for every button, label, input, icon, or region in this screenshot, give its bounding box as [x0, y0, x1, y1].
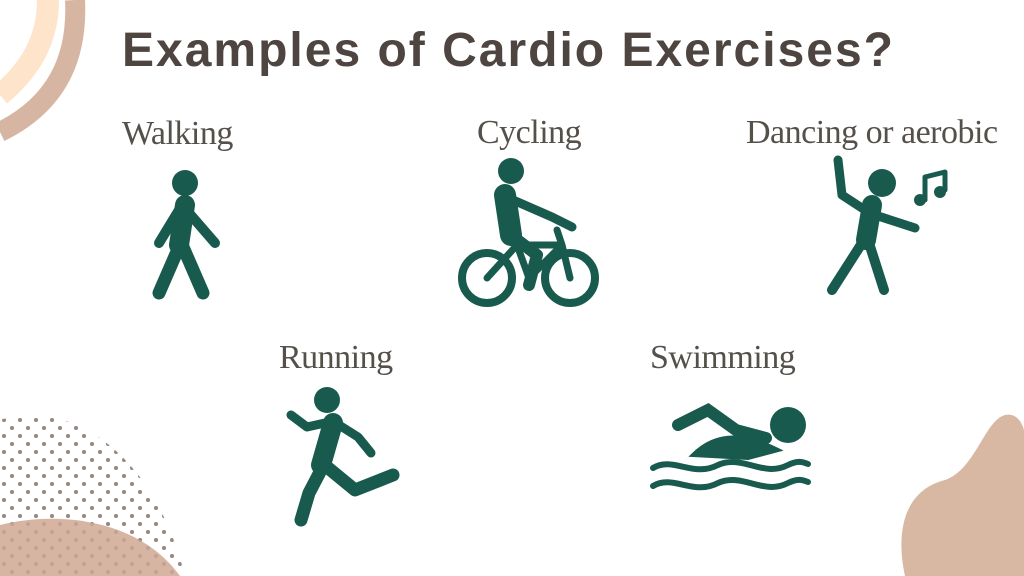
label: running: Running	[279, 339, 393, 376]
label: dancing: Dancing or aerobic	[746, 114, 998, 151]
title: Examples of Cardio Exercises?	[122, 24, 895, 77]
decoration: bottom-left dots and blob	[0, 418, 182, 576]
icon: walking	[152, 170, 220, 300]
icon: running	[286, 387, 400, 526]
label: walking: Walking	[122, 115, 233, 152]
decoration: top-left arcs	[0, 0, 86, 141]
label: swimming: Swimming	[650, 339, 795, 376]
icon: cycling	[458, 158, 599, 307]
label: cycling: Cycling	[477, 114, 581, 151]
icon: swimming	[650, 403, 811, 490]
icon: dancing	[827, 156, 948, 295]
decoration: bottom-right blob	[901, 414, 1024, 576]
